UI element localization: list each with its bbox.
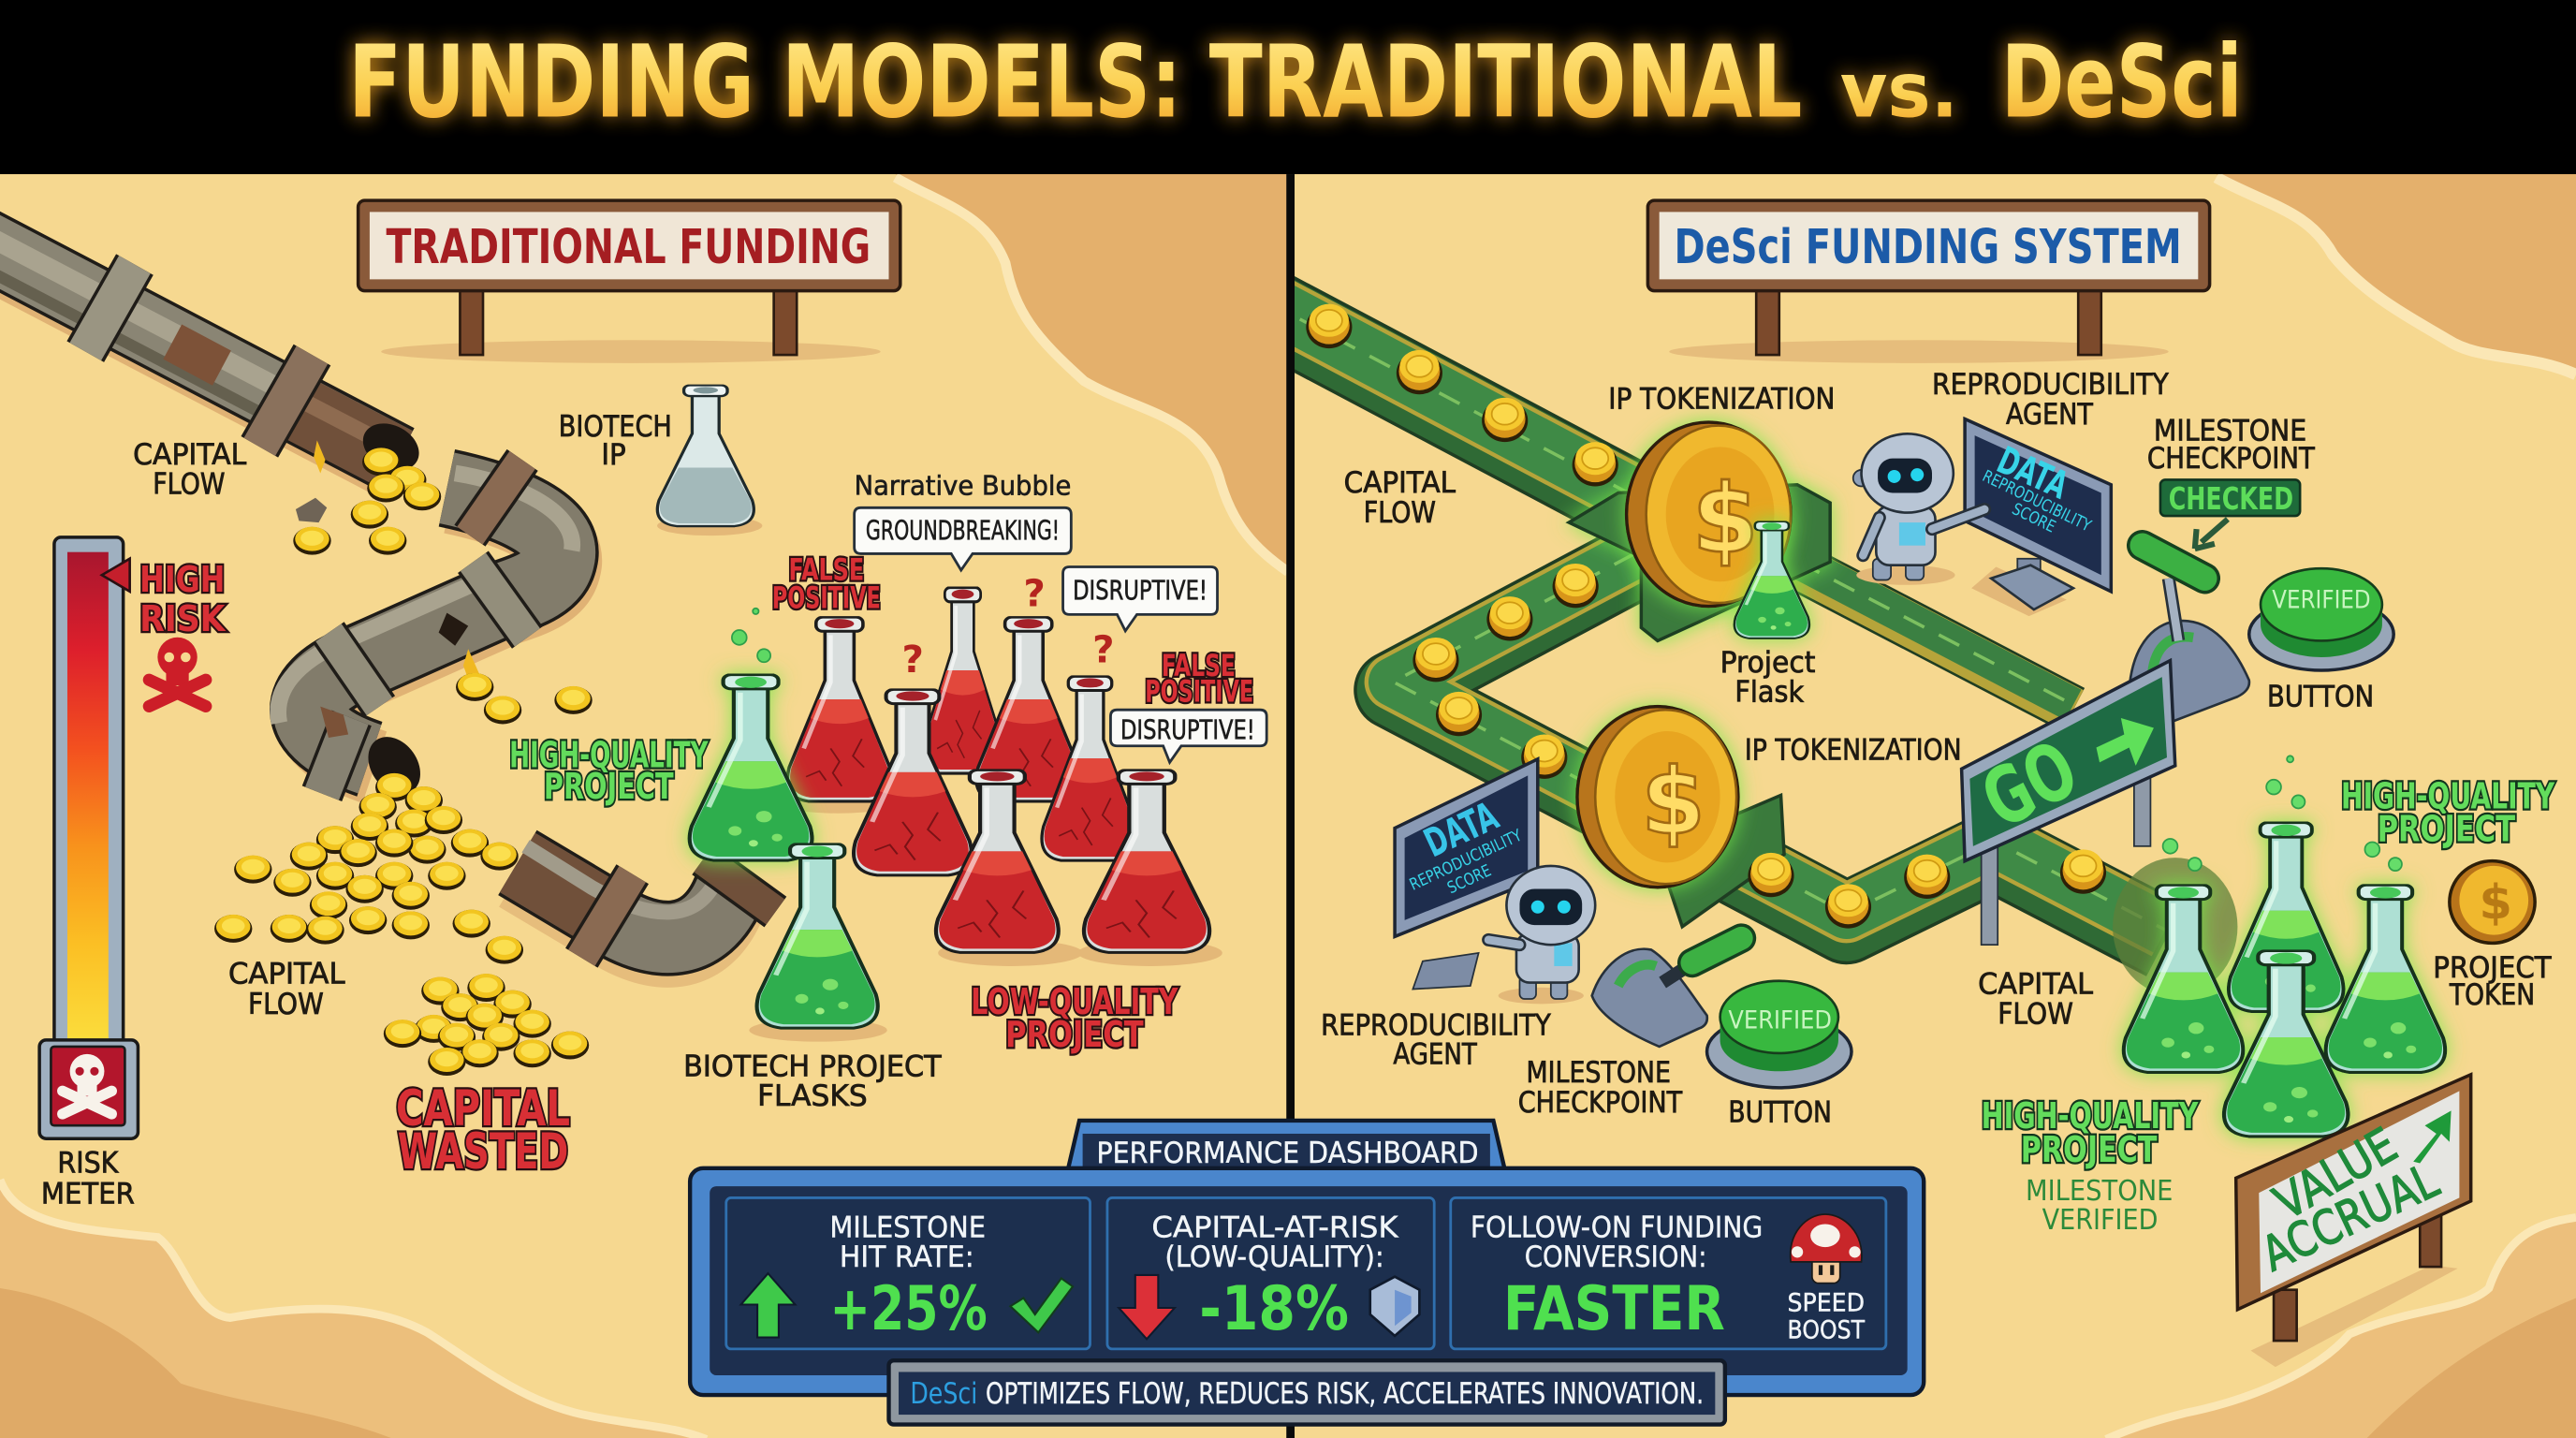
- label: project flask: Project: [1720, 646, 1815, 680]
- token coin: ip tokenization lower: $: [1641, 749, 1705, 856]
- monitor: data reproducibility lower: REPRODUCIBILITY: [1407, 827, 1525, 895]
- label: false positive 1: POSITIVE: [772, 581, 881, 615]
- title band: DeSci: [2001, 25, 2243, 141]
- label: biotech ip: [559, 410, 672, 472]
- conveyor: lower run: [1701, 836, 2165, 940]
- sign: desci funding system: [1647, 200, 2210, 363]
- icons: question marks: ?: [902, 638, 924, 682]
- card: follow-on funding: FASTER: [1503, 1274, 1725, 1344]
- label: biotech project flasks: FLASKS: [757, 1079, 868, 1113]
- label: reproducibility agent lower: REPRODUCIBILITY: [1321, 1009, 1551, 1043]
- label: false positive 2: [1145, 650, 1253, 709]
- icon: project token: $: [2479, 875, 2512, 931]
- label: risk meter: METER: [41, 1178, 135, 1211]
- label: project token: TOKEN: [2449, 978, 2535, 1012]
- card: follow-on funding: SPEED: [1788, 1290, 1865, 1318]
- label: reproducibility agent lower: AGENT: [1393, 1038, 1477, 1072]
- speech bubble: disruptive upper: DISRUPTIVE!: [1073, 576, 1208, 607]
- card: capital at risk: [1107, 1197, 1434, 1349]
- halo behind flask: [2113, 858, 2237, 996]
- monitor: data reproducibility lower: SCORE: [1444, 861, 1494, 898]
- label: low-quality project: PROJECT: [1005, 1014, 1144, 1056]
- label: capital wasted: WASTED: [398, 1123, 568, 1181]
- label: capital flow 1: CAPITAL: [133, 438, 246, 472]
- sign: traditional funding: TRADITIONAL FUNDING: [386, 220, 871, 275]
- token coin: ip tokenization upper: $: [1692, 465, 1759, 576]
- center divider: [1286, 174, 1295, 1438]
- label: false positive 1: [772, 554, 881, 615]
- dashboard tab: [1068, 1121, 1505, 1173]
- label: capital flow 1: [133, 438, 246, 502]
- label: capital flow 2: FLOW: [248, 988, 324, 1021]
- label: high risk: HIGH: [139, 559, 225, 601]
- label: biotech project flasks: [683, 1050, 942, 1113]
- label: high-quality project lower: HIGH-QUALITY: [1982, 1095, 2199, 1137]
- label: ip tokenization lower: IP TOKENIZATION: [1745, 734, 1962, 768]
- conveyor: left loop: [1393, 553, 1676, 838]
- title band: FUNDING MODELS: TRADITIONAL: [348, 25, 1802, 141]
- label: project token: PROJECT: [2433, 951, 2552, 985]
- monitor: data reproducibility upper: DATA: [1991, 438, 2075, 508]
- speech bubble: groundbreaking: GROUNDBREAKING!: [866, 516, 1060, 547]
- label: narrative bubble: Narrative Bubble: [855, 470, 1071, 501]
- dashboard frame: [690, 1168, 1924, 1395]
- label: milestone checkpoint lower: CHECKPOINT: [1518, 1086, 1682, 1120]
- label: capital flow lower right: FLOW: [1998, 997, 2073, 1031]
- label: milestone verified: [2026, 1175, 2173, 1237]
- pipe segment: middle elbow: [278, 460, 572, 794]
- title band: FUNDING MODELS: TRADITIONAL: [348, 25, 1802, 141]
- icons: question marks: ?: [1023, 572, 1046, 616]
- sign: go: GO: [1968, 723, 2091, 846]
- label: high-quality project left: PROJECT: [544, 766, 674, 808]
- label: capital flow 2: [228, 958, 345, 1021]
- sign: traditional funding: [359, 200, 900, 363]
- card: milestone hit rate: +25%: [829, 1274, 988, 1344]
- label: capital flow right: FLOW: [1364, 496, 1436, 530]
- label: button lower: BUTTON: [1728, 1096, 1832, 1130]
- flask: project flask: [1734, 521, 1809, 638]
- label: milestone verified: MILESTONE: [2026, 1175, 2173, 1208]
- takeaway bar: OPTIMIZES FLOW, REDUCES RISK, ACCELERATES INNOVATION.: [986, 1377, 1704, 1411]
- monitor: data reproducibility lower: DATA: [1417, 793, 1505, 866]
- conveyor: entry run: [1265, 301, 1660, 518]
- icon: project token: [2450, 861, 2535, 943]
- risk meter: [39, 537, 138, 1138]
- pipe segment: lower: [518, 846, 775, 958]
- monitor: data reproducibility upper: [1965, 419, 2111, 616]
- button: verified upper: VERIFIED: [2272, 586, 2371, 614]
- gate: upper tokenizer: [1569, 485, 1830, 640]
- flask group: high-quality projects right: [2113, 756, 2445, 1137]
- label: capital flow 2: CAPITAL: [228, 958, 345, 991]
- label: capital wasted: CAPITAL: [396, 1080, 570, 1137]
- speech bubble: disruptive lower: [1110, 710, 1266, 762]
- token coin: ip tokenization upper: [1627, 422, 1791, 607]
- arrow: to lever: [2195, 520, 2228, 549]
- label: low-quality project: LOW-QUALITY: [971, 981, 1178, 1023]
- label: low-quality project: [971, 981, 1178, 1056]
- broken pipeline: [0, 225, 775, 1076]
- icon: red skull: [149, 638, 206, 706]
- title band: DeSci: [2001, 25, 2243, 141]
- label: button upper: BUTTON: [2267, 681, 2374, 714]
- monitor: data reproducibility upper: SCORE: [2009, 500, 2058, 537]
- monitor: data reproducibility lower: [1395, 759, 1538, 990]
- label: false positive 1: FALSE: [788, 554, 864, 588]
- sign: go: [1962, 661, 2175, 945]
- label: reproducibility agent upper: [1932, 368, 2169, 432]
- takeaway bar: [889, 1360, 1725, 1425]
- conveyor belt: capital flow: [1265, 301, 2165, 940]
- label: capital flow 1: FLOW: [153, 468, 225, 502]
- label: project token: [2433, 951, 2552, 1012]
- flask: biotech ip: [657, 385, 762, 536]
- card: follow-on funding: BOOST: [1788, 1316, 1866, 1344]
- card: milestone hit rate: [726, 1197, 1090, 1349]
- sign: value accrual: [2236, 1075, 2471, 1367]
- label: high risk: [139, 559, 227, 640]
- label: biotech ip: IP: [601, 438, 626, 472]
- label: false positive 2: FALSE: [1162, 650, 1236, 683]
- label: high-quality project right: PROJECT: [2378, 809, 2516, 851]
- card: capital at risk: CAPITAL-AT-RISK: [1151, 1211, 1399, 1245]
- label: high risk: RISK: [139, 598, 227, 640]
- label: biotech ip: BIOTECH: [559, 410, 672, 444]
- pipe segment: upper: [0, 225, 398, 478]
- lever: milestone checkpoint upper: [2130, 546, 2249, 723]
- flask group: low-quality projects: [775, 588, 1222, 966]
- label: risk meter: [41, 1146, 135, 1211]
- token coin: ip tokenization lower: [1577, 707, 1738, 888]
- label: milestone checkpoint upper: MILESTONE: [2154, 414, 2306, 448]
- card: milestone hit rate: HIT RATE:: [840, 1240, 974, 1274]
- card: capital at risk: (LOW-QUALITY):: [1164, 1240, 1384, 1274]
- label: milestone checkpoint lower: [1518, 1056, 1682, 1120]
- label: high-quality project left: HIGH-QUALITY: [509, 735, 709, 777]
- label: reproducibility agent lower: [1321, 1009, 1551, 1072]
- title band: vs.: [1840, 48, 1958, 136]
- label: high-quality project lower: [1982, 1095, 2199, 1171]
- button: verified lower: VERIFIED: [1728, 1007, 1832, 1035]
- label: false positive 2: POSITIVE: [1145, 675, 1253, 709]
- gate: lower tokenizer: [1669, 795, 1784, 927]
- speech bubble: groundbreaking: [855, 507, 1071, 570]
- label: ip tokenization upper: IP TOKENIZATION: [1608, 382, 1835, 416]
- speech bubble: disruptive upper: [1063, 566, 1218, 631]
- conveyor: right rear run: [1799, 562, 2073, 710]
- icons: question marks: ?: [1092, 627, 1115, 671]
- label: biotech project flasks: BIOTECH PROJECT: [683, 1050, 942, 1084]
- card: follow-on funding: CONVERSION:: [1525, 1240, 1707, 1274]
- flask: high-quality project: [690, 675, 812, 860]
- card: capital at risk: -18%: [1199, 1274, 1349, 1344]
- flask: biotech project: [749, 844, 887, 1042]
- card: follow-on funding: FOLLOW-ON FUNDING: [1471, 1211, 1763, 1245]
- label: reproducibility agent upper: AGENT: [2006, 398, 2093, 432]
- badge: checked: CHECKED: [2169, 480, 2293, 517]
- rising bubbles: [2163, 756, 2402, 871]
- lever: milestone checkpoint lower: [1592, 938, 1741, 1047]
- label: milestone checkpoint upper: [2147, 414, 2315, 476]
- label: high-quality project right: [2341, 775, 2555, 851]
- label: project flask: [1720, 646, 1815, 709]
- conveyor coins: [1306, 304, 2106, 929]
- dashboard tab: PERFORMANCE DASHBOARD: [1097, 1137, 1479, 1170]
- robot agent upper: [1853, 433, 1984, 585]
- speech bubble: disruptive lower: DISRUPTIVE!: [1120, 715, 1255, 746]
- label: capital flow right: [1344, 466, 1456, 530]
- card: milestone hit rate: MILESTONE: [829, 1211, 986, 1245]
- card: follow-on funding: [1451, 1197, 1886, 1349]
- robot agent lower: [1488, 866, 1595, 1004]
- label: risk meter: RISK: [57, 1146, 119, 1180]
- title band: vs.: [1840, 48, 1958, 136]
- label: reproducibility agent upper: REPRODUCIBILITY: [1932, 368, 2169, 402]
- icon: speed boost mushroom: [1791, 1214, 1862, 1284]
- label: high-quality project lower: PROJECT: [2021, 1129, 2158, 1171]
- label: capital wasted: [396, 1080, 570, 1181]
- sign: desci funding system: DeSci FUNDING SYSTEM: [1674, 220, 2182, 275]
- takeaway bar: DeSci: [910, 1377, 977, 1411]
- icons: question marks: [902, 572, 1115, 682]
- label: milestone verified: VERIFIED: [2042, 1204, 2159, 1237]
- button: verified upper: [2249, 568, 2393, 670]
- monitor: data reproducibility upper: REPRODUCIBILITY: [1979, 467, 2094, 536]
- title band: [0, 0, 2576, 174]
- label: milestone checkpoint lower: MILESTONE: [1526, 1056, 1671, 1090]
- label: capital flow right: CAPITAL: [1344, 466, 1456, 500]
- performance dashboard: [690, 1121, 1924, 1425]
- spilled coins: [214, 440, 593, 1076]
- label: capital flow lower right: [1978, 967, 2093, 1031]
- button: verified lower: [1707, 981, 1852, 1088]
- label: project flask: Flask: [1734, 675, 1804, 709]
- sign: value accrual: ACCRUAL: [2254, 1153, 2448, 1283]
- label: capital flow lower right: CAPITAL: [1978, 967, 2093, 1001]
- label: high-quality project left: [509, 735, 709, 808]
- label: milestone checkpoint upper: CHECKPOINT: [2147, 442, 2315, 476]
- pointer: [102, 559, 130, 592]
- icon: rising bubbles: [732, 609, 770, 662]
- sign: value accrual: VALUE: [2265, 1118, 2407, 1231]
